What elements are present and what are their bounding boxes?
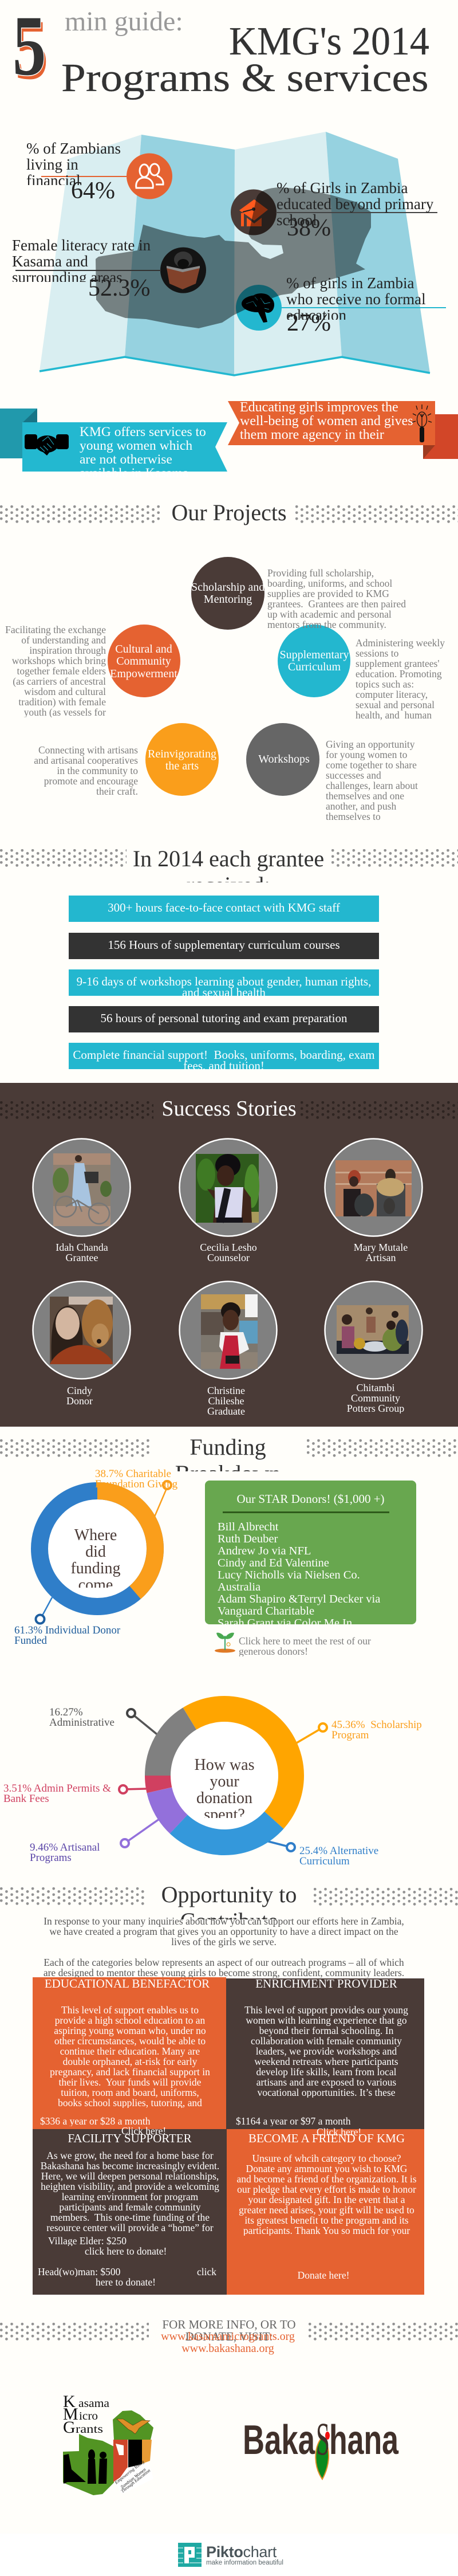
connector line: poverty xyxy=(41,176,127,177)
facility donation levels xyxy=(38,2236,216,2287)
dotted band: grantee right xyxy=(331,849,458,867)
dotted band: funding left xyxy=(0,1439,151,1457)
logo: Kasama Micro Grants: asama xyxy=(78,2397,109,2410)
circle: Supplementary Curriculum xyxy=(278,625,350,697)
icon: people circle xyxy=(127,154,172,199)
circle label: Reinvigorating the arts: Reinvigorating the arts xyxy=(148,748,216,772)
website links: www.kasamamicrogrants.org www.bakashana.org xyxy=(161,2331,295,2355)
description: cultural: Facilitating the exchange of understanding and inspiration through workshops which bring together female elders (as carriers of ancestral wisdom and cultural tradition) with female youth (as vessels for xyxy=(5,625,106,717)
panel heading: enrichment provider: ENRICHMENT PROVIDER xyxy=(255,1977,397,1990)
intro paragraph: In response to your many inquiries about how you can support our efforts here in Zambia, we have created a program that gives you an opportunity to have a direct impact on the lives of the girls we serve. Each of the categories below represents an aspect of our outreach programs – all of which are designed to mentor these young girls to become strong, confident, community leaders. xyxy=(44,1916,404,1978)
connector line: girls educated xyxy=(276,212,437,213)
divider xyxy=(223,1511,389,1513)
circle label: Supplementary Curriculum: Supplementary Curriculum xyxy=(279,649,349,673)
bar: tutoring hours: 56 hours of personal tutoring and exam preparation xyxy=(101,1011,347,1025)
stat number: 64%: 64% xyxy=(71,178,115,204)
logo: Piktochart wordmark: Piktochart xyxy=(206,2543,277,2561)
ribbon text: educating girls: Educating girls improves the well-being of women and gives them more agency in their xyxy=(240,400,413,442)
circle: Scholarship and Mentoring xyxy=(191,557,264,630)
stat number: 52.3%: 52.3% xyxy=(88,275,150,301)
bar: curriculum hours xyxy=(69,933,379,959)
dotted band: more info left xyxy=(0,2323,149,2341)
panel: success stories background xyxy=(0,1083,458,1427)
heading: Our Projects: Our Projects xyxy=(171,500,287,525)
circle label: Cultural and Community Empowerment: Cultural and Community Empowerment xyxy=(110,643,177,680)
logo: Kasama Micro Grants: Through Education xyxy=(120,2468,151,2494)
panel: star donors xyxy=(205,1481,416,1624)
dotted band: opportunity right xyxy=(314,1888,458,1906)
dotted band: Our Projects right xyxy=(295,505,458,523)
circle label: Scholarship and Mentoring: Scholarship and Mentoring xyxy=(191,581,264,606)
icon: money plant xyxy=(215,1633,235,1652)
dotted band: success left xyxy=(0,1101,153,1119)
description: workshops: Giving an opportunity for young women to come together to share successes and challenges, learn about themselves and one another, and push themselves to xyxy=(326,739,418,822)
bar: contact hours: 300+ hours face-to-face contact with KMG staff xyxy=(108,901,340,914)
stat number: 38%: 38% xyxy=(287,215,331,241)
title line 1: KMG's 2014 xyxy=(229,19,429,64)
footer strip xyxy=(0,2534,458,2576)
icon: light bulb xyxy=(412,405,432,442)
icon: brain circle xyxy=(236,285,282,331)
dotted band: funding right xyxy=(307,1439,458,1457)
heading: Success Stories: Success Stories xyxy=(161,1097,297,1121)
dotted band: success right xyxy=(301,1101,458,1119)
bar: curriculum hours: 156 Hours of supplementary curriculum courses xyxy=(108,938,340,952)
circle: Workshops xyxy=(246,723,319,796)
panel: educational benefactor xyxy=(33,1977,226,2129)
logo: Kasama Micro Grants: G xyxy=(63,2418,76,2437)
photo: Mary Mutale xyxy=(324,1138,423,1237)
logo: Kasama Micro Grants: Zambian Women xyxy=(120,2467,147,2490)
tagline: make information beautiful xyxy=(206,2559,283,2566)
enrichment description: This level of support provides our young women with learning experience that go beyond their formal schooling. In collaboration with female community leaders, we provide workshops and weekend retreats where participants develop life skills, learn from local artisans and are exposed to various vocational opportunities. It’s these xyxy=(244,2005,408,2098)
benefactor description: This level of support enables us to provide a high school education to an aspiring young woman who, under no other circumstances, would be able to continue their education. Many are double orphaned, at-risk for early pregnancy, and lack financial support in their lives. Your funds will provide tuition, room and board, uniforms, books school supplies, tutoring, and xyxy=(50,2005,210,2108)
logo: Piktochart icon xyxy=(178,2543,202,2567)
photo: Cecilia Lesho xyxy=(179,1138,278,1237)
photo: Christine Chileshe xyxy=(179,1281,278,1380)
dotted band: opportunity left xyxy=(0,1887,145,1905)
description: arts: Connecting with artisans and artisanal cooperatives in the community to promote and encourage their craft. xyxy=(34,745,138,796)
icon: handshake xyxy=(25,434,69,455)
photo: Chitambi Community Potters Group xyxy=(324,1281,423,1380)
dotted band: Our Projects left xyxy=(0,505,161,523)
panel heading: friend of KMG: BECOME A FRIEND OF KMG xyxy=(248,2131,405,2145)
logo: Bakashana xyxy=(243,2419,399,2480)
teal ribbon xyxy=(0,409,227,472)
donut chart: funding sources xyxy=(31,1480,172,1625)
logo: Kasama Micro Grants: icro xyxy=(79,2410,98,2422)
donut chart: donation spending xyxy=(118,1696,328,1855)
logo: Kasama Micro Grants xyxy=(63,2394,153,2495)
logo: Kasama Micro Grants: M xyxy=(63,2405,78,2424)
panel: facility supporter xyxy=(33,2129,227,2295)
circle: Reinvigorating the arts xyxy=(145,723,219,796)
friend description: Unsure of whcih category to choose? Donate any ammount you wish to KMG and become a friend of the organization. It is our pledge that every effort is made to honor your designated gift. In the event that a greater need arises, your gift will be used to its greatest benefit to the program and its participants. Thank You so much for your xyxy=(236,2153,417,2236)
folded map background xyxy=(39,132,431,376)
Zambia silhouette overlay xyxy=(96,187,371,328)
dotted band: grantee left xyxy=(0,849,127,867)
subtitle: min guide: min guide: xyxy=(65,6,183,37)
connector line: no education xyxy=(281,307,446,308)
description: scholarship: Providing full scholarship, boarding, uniforms, and school supplies are provided to KMG grantees. Grantees are then paired up with academic and personal mentors from the community. xyxy=(267,568,406,630)
photo: Cindy xyxy=(32,1281,131,1380)
title line 2: Programs & services xyxy=(61,56,429,100)
bar: contact hours xyxy=(69,896,379,922)
panel heading: facility supporter: FACILITY SUPPORTER xyxy=(68,2131,192,2145)
panel: enrichment provider xyxy=(226,1978,424,2129)
stat number: 27%: 27% xyxy=(287,310,331,336)
bar: tutoring hours xyxy=(69,1006,379,1032)
logo: Kasama Micro Grants: Empowering Young xyxy=(113,2459,145,2485)
orange ribbon xyxy=(228,401,458,459)
facility description: As we grow, the need for a home base for Bakashana has become increasingly evident. Here, we will deepen personal relationships, heighten visibility, and provide a welcoming learning environment for program participants and female community members. This one-time funding of the resource center will provide a “home” for xyxy=(41,2150,219,2233)
star donors heading: Our STAR Donors! ($1,000 +) xyxy=(236,1492,385,1506)
panel: friend of KMG xyxy=(227,2129,424,2295)
panel heading: educational benefactor: EDUCATIONAL BENEFACTOR xyxy=(45,1977,210,1990)
logo: Kasama Micro Grants: rants xyxy=(76,2423,103,2436)
connector line: literacy xyxy=(15,270,161,271)
icon: graduation cap circle xyxy=(231,189,277,235)
photo: Idah Chanda xyxy=(32,1138,131,1237)
icon: girl reading circle xyxy=(160,248,206,293)
circle: Cultural and Community Empowerment xyxy=(108,625,180,697)
dotted band: more info right xyxy=(309,2323,458,2341)
description: curriculum: Administering weekly sessions to supplement grantees' education. Promoting topics such as: computer literacy, sexual and personal health, and human xyxy=(356,638,445,720)
